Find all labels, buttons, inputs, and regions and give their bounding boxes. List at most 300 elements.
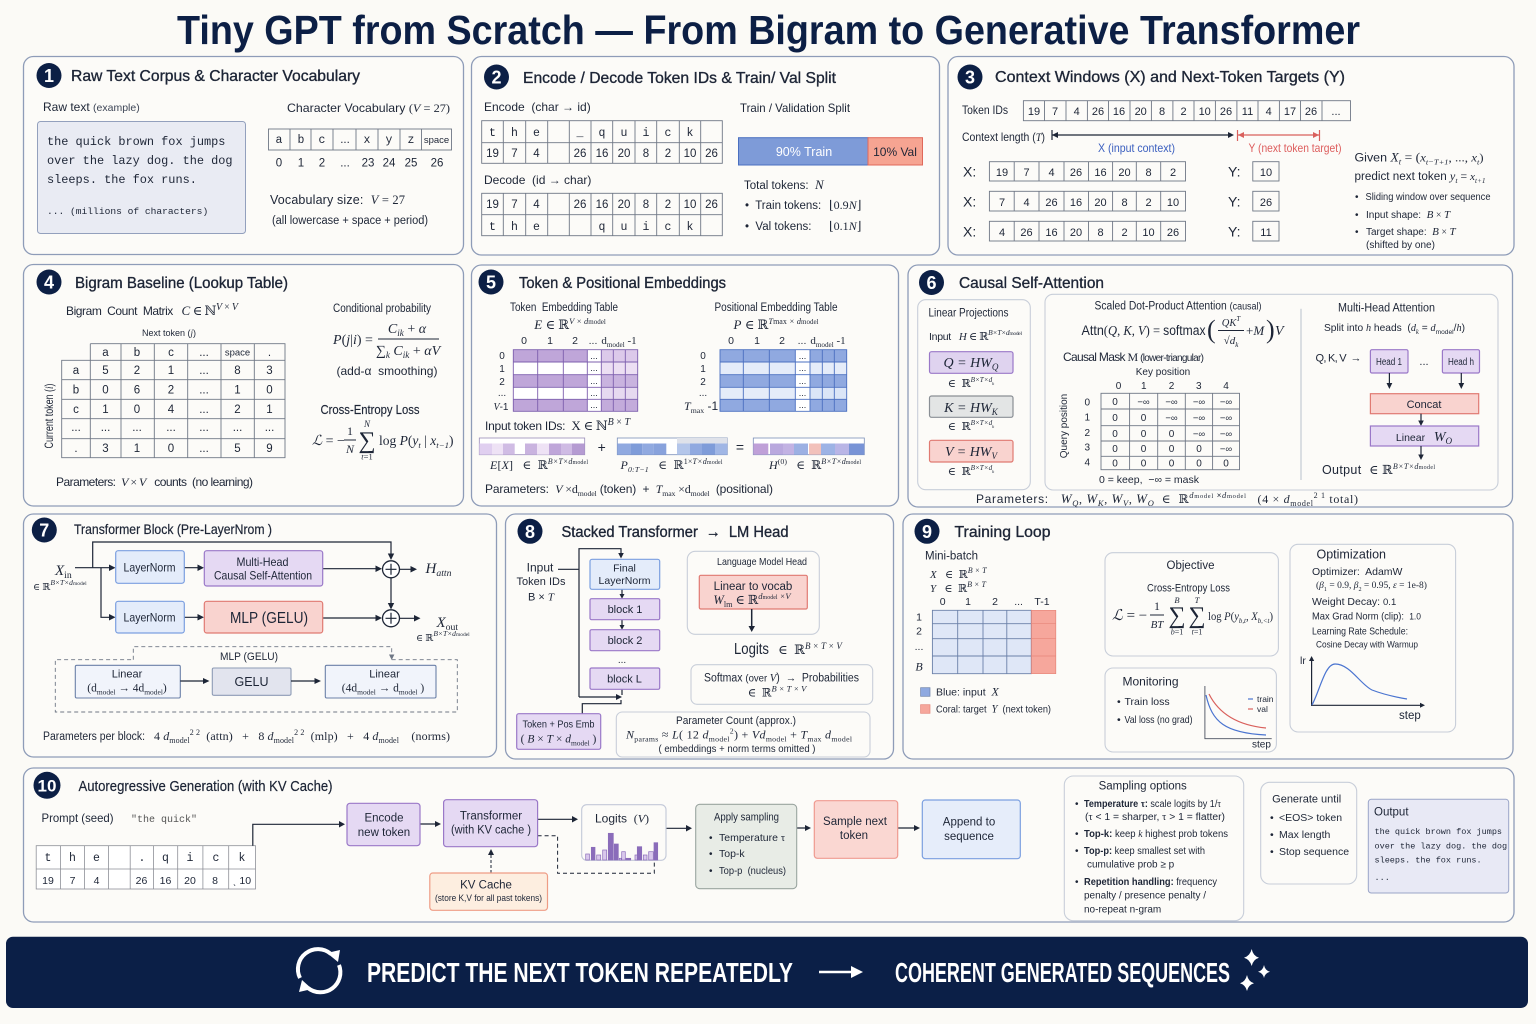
arrows inside MLP	[180, 678, 321, 684]
Q projection	[930, 352, 1013, 390]
next token label: Next token (j)	[142, 328, 196, 338]
prompt token table: 16	[160, 875, 171, 887]
vocabulary size: Vocabulary size: V = 27	[270, 193, 405, 207]
arrow to output	[1418, 446, 1424, 460]
layernorm upper	[116, 551, 184, 583]
target rows: 10	[1260, 167, 1272, 179]
split into heads: Split into h heads (dk = dmodel/h)	[1324, 322, 1465, 336]
sampling options box: Top-p: keep smallest set with	[1084, 846, 1205, 857]
arrow to linear	[1418, 414, 1424, 426]
bigram table	[62, 344, 285, 458]
causal mask table: 0	[1141, 429, 1147, 440]
split bar	[738, 138, 922, 165]
generate until box	[1261, 782, 1357, 884]
badge 1	[36, 63, 62, 88]
token embedding table: ...	[590, 363, 598, 373]
window rows: 7	[999, 197, 1005, 209]
layernorm upper: LayerNorm	[124, 560, 176, 574]
causal mask table: −∞	[1193, 429, 1205, 440]
prompt token table: 4	[94, 875, 100, 887]
MLP block	[204, 601, 323, 633]
vocabulary table: y	[386, 134, 393, 147]
input context label: X (input context)	[1098, 141, 1175, 155]
input token ids label: Input token IDs: X ∈ ℕB × T	[485, 417, 631, 433]
encode table: u	[621, 127, 627, 140]
bigram table: .	[268, 347, 271, 359]
decode label: Decode (id → char)	[484, 173, 591, 187]
window rows: 26	[1020, 227, 1033, 239]
causal mask table: 0	[1112, 458, 1118, 470]
parameters note: Parameters: V ×dmodel (token) + Tmax ×dmodel (positional)	[485, 482, 773, 498]
generate until box: Stop sequence	[1279, 846, 1349, 858]
vocabulary table: 1	[298, 158, 304, 170]
input label	[33, 563, 87, 593]
bigram table: 4	[168, 404, 175, 416]
context length label: Context length (T)	[962, 130, 1045, 144]
causal mask table: 0	[1141, 413, 1147, 424]
heading 3: Context Windows (X) and Next-Token Targets (Y)	[995, 69, 1345, 86]
vocabulary table: ...	[340, 158, 350, 170]
encode label: Encode (char → id)	[484, 100, 591, 114]
token embedding table: ...	[498, 388, 506, 399]
window rows: 2	[1170, 167, 1176, 179]
heading 4: Bigram Baseline (Lookup Table)	[75, 275, 288, 292]
conditional probability formula	[332, 322, 442, 360]
target label: Y (next token target)	[1248, 141, 1342, 155]
bigram table: ...	[233, 422, 242, 434]
causal mask table: 0	[1169, 444, 1175, 455]
prompt text: "the quick"	[131, 814, 197, 826]
ellipsis between heads: ...	[1419, 356, 1429, 368]
attention formula: (	[1207, 315, 1216, 344]
causal mask table: 4	[1223, 381, 1229, 392]
token embedding table: 0	[521, 335, 527, 347]
prompt token table: 7	[70, 875, 76, 887]
footer text left: PREDICT THE NEXT TOKEN REPEATEDLY	[367, 957, 793, 988]
encode table: 7	[511, 148, 518, 160]
target rows	[1228, 162, 1279, 241]
mini-batch grid: ...	[1014, 596, 1023, 608]
optimization box: Max Grad Norm (clip): 1.0	[1312, 610, 1421, 622]
encode table	[482, 121, 722, 163]
bigram table: ...	[71, 422, 81, 434]
decode table: e	[533, 221, 540, 234]
optimization box: Cosine Decay with Warmup	[1316, 640, 1418, 650]
causal mask table: 0	[1085, 398, 1091, 408]
input label	[517, 560, 566, 604]
target rows: 11	[1260, 227, 1272, 239]
kv cache block: KV Cache	[460, 880, 512, 892]
prompt token table: .	[139, 852, 145, 865]
positional embedding table: 0	[728, 335, 734, 347]
causal mask table: −∞	[1165, 413, 1178, 424]
bigram table: 3	[266, 365, 273, 377]
decode table: 20	[618, 199, 630, 211]
bigram table: 1	[266, 404, 273, 416]
loss chart: val	[1257, 704, 1268, 714]
title: Tiny GPT from Scratch — From Bigram to Generative Transformer	[177, 7, 1360, 53]
causal mask table: 2	[1085, 428, 1091, 439]
definition text: predict next token yt = xt+1	[1354, 169, 1486, 185]
window rows: X:	[963, 224, 976, 240]
multi-head block: Causal Self-Attention	[214, 568, 312, 582]
dashed feedback line	[538, 836, 654, 873]
bigram table: b	[134, 347, 140, 359]
prompt token table	[36, 846, 256, 889]
decode table: 26	[574, 199, 586, 211]
transformer block: Transformer	[460, 810, 522, 822]
badge 3	[958, 64, 982, 90]
encode table: t	[489, 127, 496, 140]
sampling options box: penalty / presence penalty /	[1084, 890, 1206, 902]
panel 10: autoregressive generation	[24, 768, 1514, 922]
residual add upper	[382, 561, 400, 578]
multi-head heading: Multi-Head Attention	[1338, 302, 1435, 314]
sampling options box: Top-k: keep k highest prob tokens	[1084, 829, 1228, 840]
final layernorm: Final	[613, 562, 636, 574]
token embedding table: ...	[590, 400, 598, 410]
input label: Token IDs	[517, 576, 566, 588]
split heading: Train / Validation Split	[740, 101, 851, 115]
flow arrows	[253, 816, 920, 846]
language model head	[687, 551, 819, 634]
badge 3: 3	[965, 68, 975, 88]
token ids table: 26	[1305, 106, 1317, 118]
optimization box: Optimization	[1316, 548, 1386, 562]
token embedding heading: E ∈ ℝV × dmodel	[533, 316, 606, 332]
objective box: Cross-Entropy Loss	[1147, 582, 1230, 594]
apply sampling block: •	[709, 833, 713, 844]
badge 2: 2	[491, 68, 502, 88]
causal mask table: 0	[1196, 458, 1202, 470]
heading 9: Training Loop	[954, 524, 1050, 541]
badge 2	[484, 64, 509, 90]
window rows: X:	[963, 194, 976, 210]
causal mask table: 0	[1169, 458, 1175, 470]
split stats	[744, 177, 861, 233]
token ids table: 17	[1284, 106, 1296, 118]
V projection: V = HWV	[945, 445, 998, 461]
badge 6	[919, 270, 944, 295]
target rows: 26	[1260, 197, 1272, 209]
window rows: 19	[996, 167, 1008, 179]
causal mask table: 0	[1112, 444, 1118, 455]
badge 10	[34, 772, 60, 799]
vocabulary heading: Character Vocabulary (V = 27)	[287, 101, 450, 115]
token embedding table: V-1	[493, 402, 509, 413]
vocabulary table: space	[424, 135, 449, 146]
bigram table: 1	[134, 443, 140, 455]
decode table: i	[643, 221, 650, 234]
conditional probability formula: P(j|i) =	[332, 333, 373, 348]
window rows: 20	[1118, 167, 1131, 179]
split bar: 90% Train	[776, 145, 832, 159]
layernorm lower: LayerNorm	[124, 610, 176, 624]
bigram table: c	[73, 404, 79, 416]
plus sign: +	[598, 439, 606, 455]
vocabulary table: x	[364, 134, 371, 147]
append block: sequence	[944, 831, 994, 843]
encode table: 26	[574, 148, 586, 160]
footer banner	[6, 937, 1528, 1008]
badge 9: 9	[922, 522, 932, 542]
definition text: •	[1355, 192, 1359, 203]
vocabulary table: c	[319, 134, 326, 147]
input label: ∈ ℝB×T×dmodel	[33, 578, 87, 593]
badge 7: 7	[39, 520, 49, 540]
heading 6: Causal Self-Attention	[959, 275, 1104, 292]
window rows: 8	[1097, 227, 1104, 239]
encode table: c	[665, 127, 672, 140]
positional embedding table: ...	[799, 363, 806, 373]
causal mask table: −∞	[1165, 397, 1178, 408]
token ids label: Token IDs	[962, 103, 1008, 117]
window rows: 4	[1048, 167, 1055, 179]
linear to vocab block	[699, 575, 807, 609]
mini-batch label: Mini-batch	[925, 550, 978, 562]
sampling options box: Temperature τ: scale logits by 1/τ	[1084, 799, 1221, 810]
parameter count box: Nparams ≈ L( 12 dmodel2) + Vdmodel + Tmax dmodel	[625, 726, 853, 744]
X out label: Xout	[436, 615, 458, 633]
window rows: 10	[1142, 227, 1155, 239]
sampling options box: cumulative prob ≥ p	[1087, 860, 1175, 870]
decode table: 2	[665, 199, 671, 211]
output box: the quick brown fox jumps	[1374, 827, 1502, 837]
matrix heading: Bigram Count Matrix C ∈ ℕV × V	[66, 302, 240, 318]
optimization box: Learning Rate Schedule:	[1312, 626, 1408, 638]
monitoring box: Val loss (no grad)	[1124, 714, 1192, 726]
apply sampling block: •	[709, 849, 713, 860]
definition text: •	[1355, 210, 1359, 221]
append block	[922, 800, 1020, 859]
MLP block: MLP (GELU)	[230, 610, 308, 627]
encode table: 26	[705, 148, 718, 160]
output box	[1368, 799, 1509, 893]
positional embedding heading	[714, 302, 838, 332]
apply sampling block: Temperature τ	[719, 832, 785, 844]
prompt token table: q	[162, 852, 169, 865]
append block: Append to	[943, 816, 995, 828]
heading 10: Autoregressive Generation (with KV Cache)	[78, 778, 332, 795]
cross entropy formula: ℒ = −	[312, 434, 345, 449]
attention formula: +M	[1246, 323, 1265, 338]
bigram table: ...	[166, 422, 176, 434]
token embedding table: ...	[590, 388, 598, 398]
encode table: h	[511, 127, 518, 140]
token ids table: 4	[1074, 106, 1080, 118]
bigram table: ...	[265, 422, 274, 434]
sampling options box: •	[1075, 829, 1079, 840]
token embedding table: 0	[499, 351, 505, 362]
loss chart: step	[1252, 740, 1271, 750]
cross entropy formula: 1	[347, 424, 353, 438]
decode table: 19	[486, 199, 499, 211]
encode table: 19	[486, 148, 499, 160]
gelu block	[212, 668, 291, 695]
linear up block: (dmodel → 4dmodel)	[87, 682, 167, 696]
parameters note: Parameters: WQ, WK, WV, WO ∈ ℝdmodel ×dmodel (4 × dmodel2 1 total)	[976, 490, 1358, 508]
icon: sparkles	[1240, 949, 1270, 991]
positional embedding heading: Positional Embedding Table	[714, 302, 838, 314]
positional embedding table: ...	[799, 376, 806, 386]
badge 10: 10	[38, 776, 56, 796]
scaled dot product heading: Scaled Dot-Product Attention (causal)	[1094, 300, 1262, 312]
positional embedding table: 2	[700, 377, 706, 388]
mini-batch label	[925, 550, 987, 595]
linear down block: Linear	[369, 668, 400, 680]
parameter count box: ( embeddings + norm terms omitted )	[658, 743, 816, 755]
cross entropy heading: Cross-Entropy Loss	[320, 403, 420, 417]
token ids table: 26	[1092, 106, 1104, 118]
transformer block	[444, 800, 538, 847]
window rows: X:	[963, 164, 976, 180]
window rows: 8	[1145, 167, 1152, 179]
bigram table: ...	[132, 422, 142, 434]
objective box	[1105, 553, 1278, 656]
softmax box: Softmax (over V) → Probabilities	[704, 672, 859, 684]
causal mask table: 0	[1169, 429, 1175, 440]
attention formula: V	[1275, 324, 1285, 339]
causal mask table: 3	[1085, 442, 1091, 454]
badge 7	[32, 518, 57, 542]
input label: Input	[527, 560, 554, 574]
sample next token block	[814, 801, 898, 858]
cross entropy formula: t=1	[361, 452, 373, 462]
linear to vocab block: Linear to vocab	[714, 581, 792, 593]
encode table: q	[599, 127, 605, 140]
cross entropy formula: N	[363, 419, 371, 429]
window rows: 4	[999, 227, 1005, 239]
kv cache dashed arrow	[488, 849, 494, 873]
causal mask table: −∞	[1220, 429, 1232, 440]
equals sign: =	[736, 439, 744, 455]
heading 7: Transformer Block (Pre-LayerNrom )	[74, 521, 272, 537]
token embedding table: 2	[572, 335, 578, 347]
encode block: new token	[358, 827, 410, 839]
mask legend: 0 = keep, −∞ = mask	[1099, 474, 1200, 486]
causal mask table: 0	[1141, 444, 1147, 455]
block 1: block 1	[608, 604, 642, 616]
causal mask table: −∞	[1137, 397, 1150, 408]
positional embedding table: ...	[799, 388, 806, 398]
monitoring box	[1105, 668, 1276, 752]
positional embedding table: 2	[779, 335, 785, 347]
decode table: 10	[684, 199, 696, 211]
block L: block L	[607, 674, 642, 686]
window rows: 10	[1167, 197, 1179, 209]
positional embedding heading: P ∈ ℝTmax × dmodel	[732, 316, 819, 332]
prompt token table: h	[69, 852, 76, 865]
encode table: 10	[684, 148, 696, 160]
concat block: Concat	[1407, 399, 1441, 411]
panel 4: bigram baseline	[24, 264, 464, 506]
K projection	[930, 396, 1013, 433]
token ids table: 19	[1028, 106, 1040, 118]
linear down block	[325, 665, 436, 698]
sampling options box: •	[1075, 877, 1079, 888]
cross entropy formula: ∑	[358, 428, 376, 454]
raw text box: sleeps. the fox runs.	[47, 173, 197, 187]
softmax box: ∈ ℝB × T × V	[748, 684, 808, 700]
bigram table: ...	[199, 443, 209, 455]
sub-panel: attention and multi-head	[1045, 294, 1498, 490]
bigram table: 8	[234, 365, 241, 377]
linear block: Linear WO	[1396, 430, 1453, 446]
vocabulary table: b	[298, 134, 305, 147]
window rows: 8	[1121, 197, 1128, 209]
encode table: 8	[643, 148, 649, 160]
panel 5: token and positional embeddings	[472, 265, 898, 506]
logits shape: Logits	[734, 641, 769, 658]
mini-batch grid: 1	[965, 596, 971, 608]
loss chart: train	[1257, 694, 1274, 704]
bigram table: 9	[266, 443, 273, 455]
strip: combined embedding	[753, 438, 864, 455]
bigram table: ...	[199, 384, 209, 396]
badge 5: 5	[486, 272, 496, 292]
objective box: ℒ = −	[1112, 608, 1147, 624]
token embedding table: ...	[590, 376, 598, 386]
monitoring box: •	[1117, 714, 1121, 726]
prompt token table: ˎ 10	[233, 875, 251, 887]
causal mask table: 4	[1085, 458, 1091, 468]
split stats: • Train tokens:	[745, 200, 821, 212]
mini-batch label: X ∈ ℝB × T	[929, 566, 987, 581]
learning rate chart	[1300, 655, 1425, 722]
prompt token table: e	[93, 852, 100, 865]
token ids table: ...	[1331, 106, 1341, 118]
token embedding table: 2	[499, 377, 505, 388]
definition text: •	[1355, 227, 1359, 238]
output box: over the lazy dog. the dog	[1374, 842, 1507, 852]
final layernorm: LayerNorm	[599, 575, 651, 587]
conditional probability formula: ∑k Cik + αV	[376, 344, 442, 360]
learning rate chart: step	[1399, 710, 1421, 722]
final layernorm	[590, 559, 660, 589]
Q projection: ∈ ℝB×T×d k	[948, 376, 995, 390]
objective box: T	[1195, 595, 1201, 605]
cross entropy formula: log P(yt | xt−1)	[379, 433, 454, 450]
sampling options box: •	[1075, 799, 1079, 810]
bigram table: 5	[234, 443, 241, 455]
bigram table: 2	[234, 404, 241, 416]
badge 6: 6	[926, 273, 937, 293]
legend: Coral: target Y (next token)	[936, 702, 1051, 716]
token embedding table: 1	[547, 335, 553, 347]
encode table: k	[687, 127, 694, 140]
projections heading: Linear Projections	[928, 306, 1008, 320]
sampling options box: no-repeat n-gram	[1084, 904, 1161, 916]
causal mask table: −∞	[1220, 444, 1232, 455]
encode table: 2	[665, 148, 671, 160]
decode table: u	[621, 221, 627, 234]
vocabulary table: 25	[405, 158, 417, 170]
optimization box: (β1 = 0.9, β2 = 0.95, ε = 1e-8)	[1316, 580, 1427, 593]
decode table: 4	[533, 199, 540, 211]
generate until box: Max length	[1279, 829, 1331, 841]
parameter count box: Parameter Count (approx.)	[676, 715, 796, 727]
icon: repeat cycle	[298, 949, 340, 992]
prompt token table: k	[239, 852, 246, 865]
vocabulary table: z	[408, 134, 414, 147]
panel 3: context windows	[948, 56, 1514, 255]
prompt token table: c	[213, 852, 220, 865]
token ids table: 4	[1266, 106, 1272, 118]
panel 8: stacked transformer and LM head	[506, 514, 894, 759]
token plus position embedding	[517, 714, 601, 749]
arrow: input context span	[1052, 130, 1234, 140]
definition text: Input shape: B × T	[1366, 209, 1451, 221]
